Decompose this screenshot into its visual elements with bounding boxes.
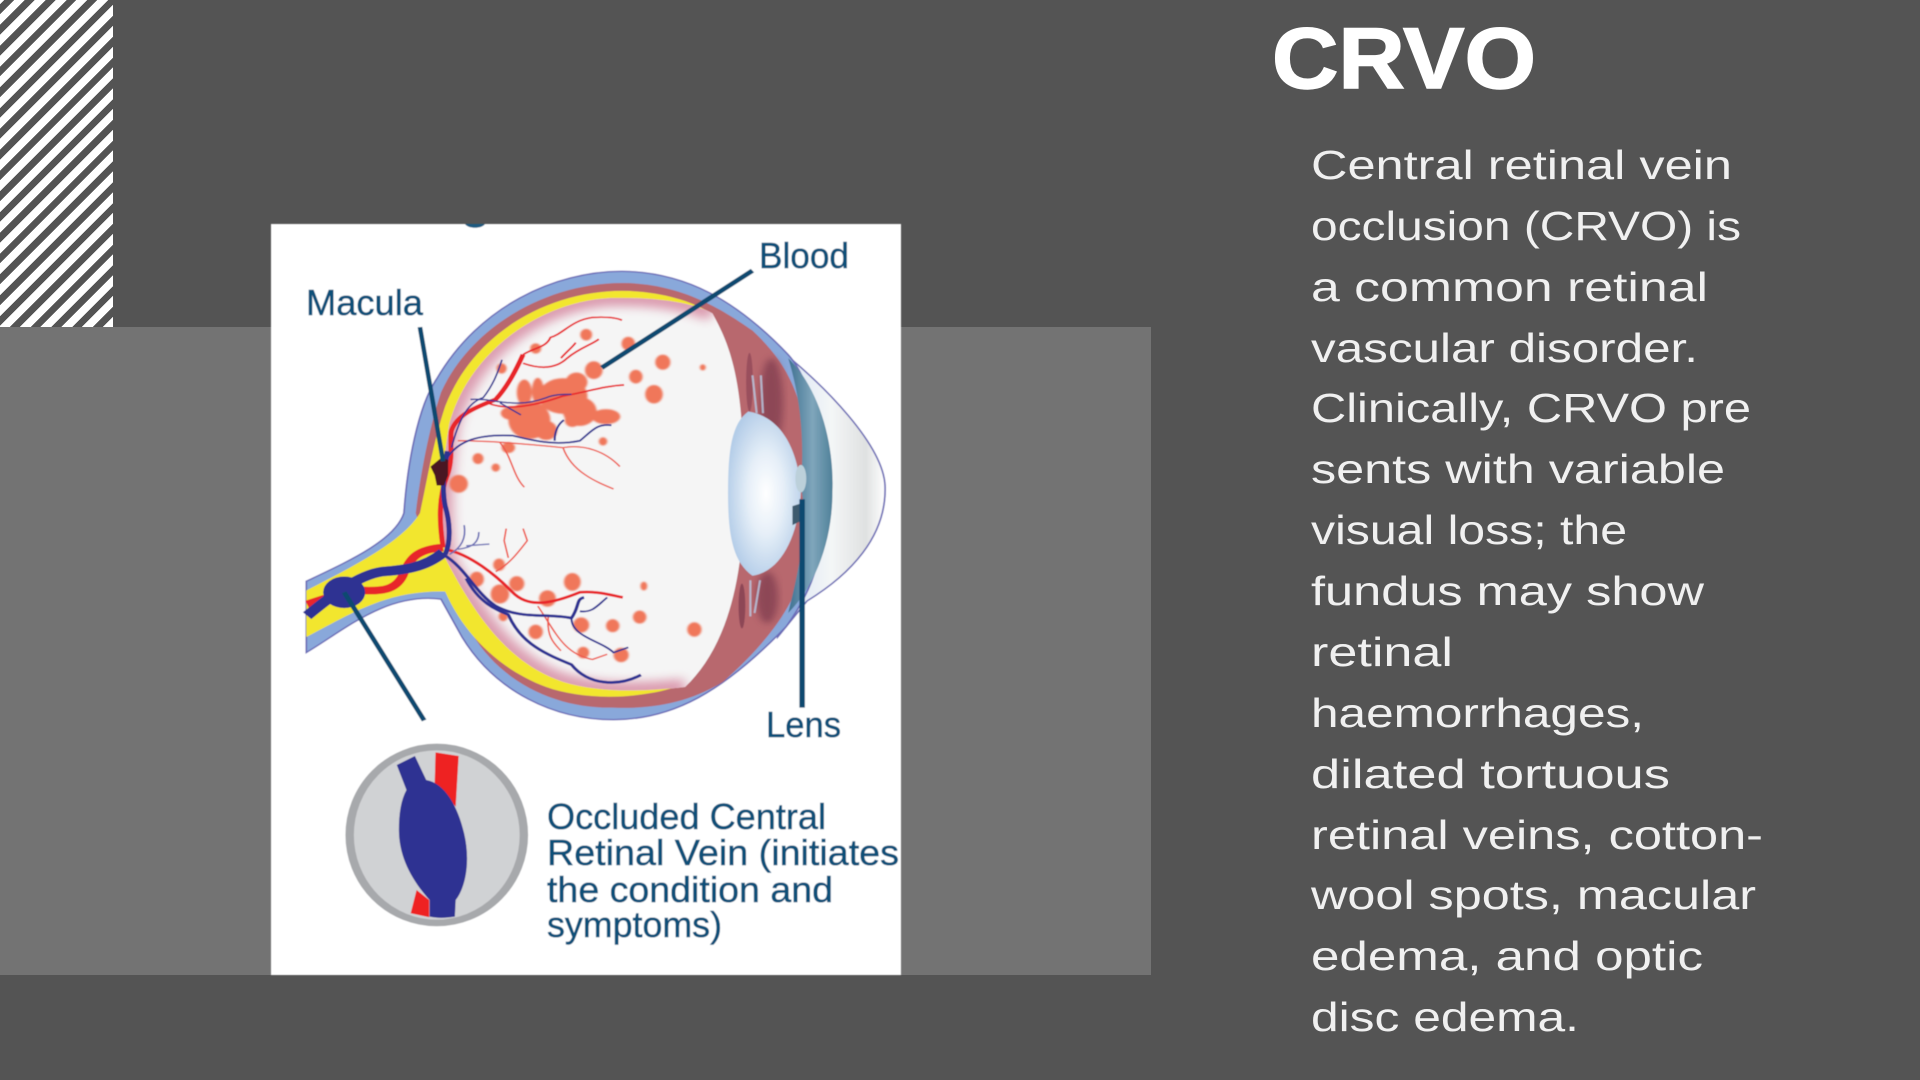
vitreous interior [442, 297, 742, 692]
vessel disc [350, 747, 524, 923]
macula [430, 458, 448, 486]
body paragraph: fundus may show [1311, 568, 1704, 614]
body paragraph: retinal veins, cotton- [1311, 812, 1763, 858]
caption: occluded central retinal vein: symptoms) [547, 904, 722, 945]
retinal arteries [307, 317, 624, 659]
body paragraph: edema, and optic [1311, 933, 1703, 979]
body paragraph: Central retinal vein [1311, 142, 1732, 188]
body paragraph: a common retinal [1311, 264, 1708, 310]
label: Macula: Macula [306, 282, 424, 323]
choroid layer [416, 283, 807, 708]
retinal veins [307, 360, 641, 682]
caption: occluded central retinal vein [547, 796, 899, 945]
occluded vein [397, 756, 467, 918]
body paragraph: visual loss; the [1311, 507, 1627, 553]
occlusion in the optic nerve [323, 576, 365, 608]
figure: eye diagram with central retinal vein occlusion [270, 223, 902, 976]
body paragraph: disc edema. [1311, 994, 1579, 1040]
body paragraph [1310, 142, 1763, 1040]
pupil edge [792, 465, 806, 525]
label: Blood: Blood [759, 235, 849, 276]
body paragraph: vascular disorder. [1311, 325, 1698, 371]
title: CRVO [1272, 11, 1536, 107]
sclera and optic nerve sheath [306, 271, 824, 720]
cornea [778, 351, 885, 637]
label: Lens: Lens [766, 704, 841, 745]
white image panel [271, 224, 901, 975]
iris and anterior chamber [788, 358, 833, 613]
caption: occluded central retinal vein: Retinal Vein (initiates [547, 832, 899, 873]
retina and optic nerve [306, 291, 710, 697]
grey band behind image [0, 327, 1151, 975]
clipped caption descender at top of image [465, 224, 485, 228]
ciliary body [739, 353, 783, 628]
inset: occluded vein cross-section [350, 747, 524, 923]
body paragraph: haemorrhages, [1311, 690, 1644, 736]
lens [728, 411, 801, 576]
decorative striped block [0, 0, 113, 327]
pointer lines [344, 271, 802, 720]
body paragraph: Clinically, CRVO pre [1311, 385, 1751, 431]
body paragraph: occlusion (CRVO) is [1311, 203, 1741, 249]
labels [306, 235, 899, 945]
eye cross-section [306, 271, 885, 720]
body paragraph: wool spots, macular [1310, 872, 1756, 918]
body paragraph: dilated tortuous [1311, 751, 1670, 797]
blood spots and haemorrhage [449, 329, 706, 662]
caption: occluded central retinal vein: the condition and [547, 869, 833, 910]
body paragraph: retinal [1311, 629, 1453, 675]
body paragraph: sents with variable [1311, 446, 1725, 492]
caption: occluded central retinal vein: Occluded Central [547, 796, 826, 837]
central retinal artery [411, 752, 459, 917]
